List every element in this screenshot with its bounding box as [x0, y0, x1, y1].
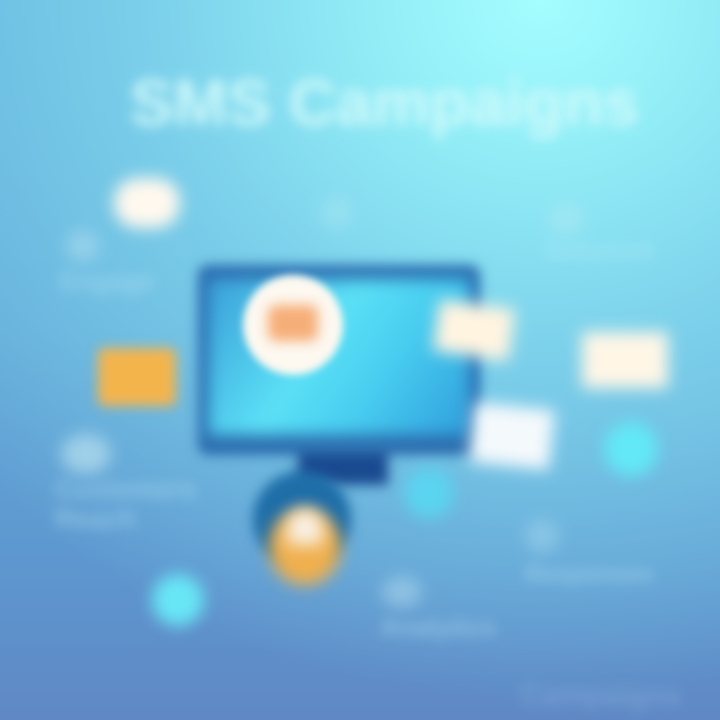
cyan dot: right	[604, 422, 658, 476]
cyan dot: center	[404, 468, 454, 518]
badge ring	[253, 471, 351, 567]
label: Customers	[55, 474, 196, 504]
footer text: Campaigns	[520, 679, 682, 712]
cyan dot: bottom left	[152, 574, 204, 626]
orange message card	[98, 348, 176, 406]
label: Engage	[60, 266, 154, 296]
icon	[382, 576, 422, 608]
text block: bottom center	[378, 571, 496, 642]
faint icon: top center	[320, 196, 354, 230]
text block: upper right	[545, 203, 653, 265]
label	[54, 474, 196, 534]
white bubble: top left	[114, 178, 180, 228]
text block: lower right	[523, 517, 653, 588]
label: Responses	[525, 561, 653, 588]
text block: upper left	[60, 226, 154, 296]
icon	[61, 434, 111, 474]
message circle	[243, 275, 343, 375]
card: lower right	[469, 402, 555, 470]
lock badge	[246, 466, 358, 596]
icon	[548, 202, 584, 236]
envelope in circle	[268, 305, 318, 341]
lock top	[287, 509, 323, 545]
text block: lower left	[54, 427, 196, 534]
card: far right	[582, 332, 668, 388]
monitor screen	[208, 279, 470, 435]
badge inner	[269, 509, 341, 585]
card: center right	[433, 299, 515, 361]
monitor frame	[198, 265, 480, 455]
label: Delivered	[545, 238, 653, 265]
icon	[525, 519, 559, 553]
illustration: monitor	[190, 256, 488, 494]
label: Analytics	[380, 612, 496, 642]
monitor stand	[298, 443, 388, 485]
label: Reach	[55, 504, 136, 534]
icon	[66, 230, 100, 262]
title: SMS Campaigns	[130, 66, 639, 139]
